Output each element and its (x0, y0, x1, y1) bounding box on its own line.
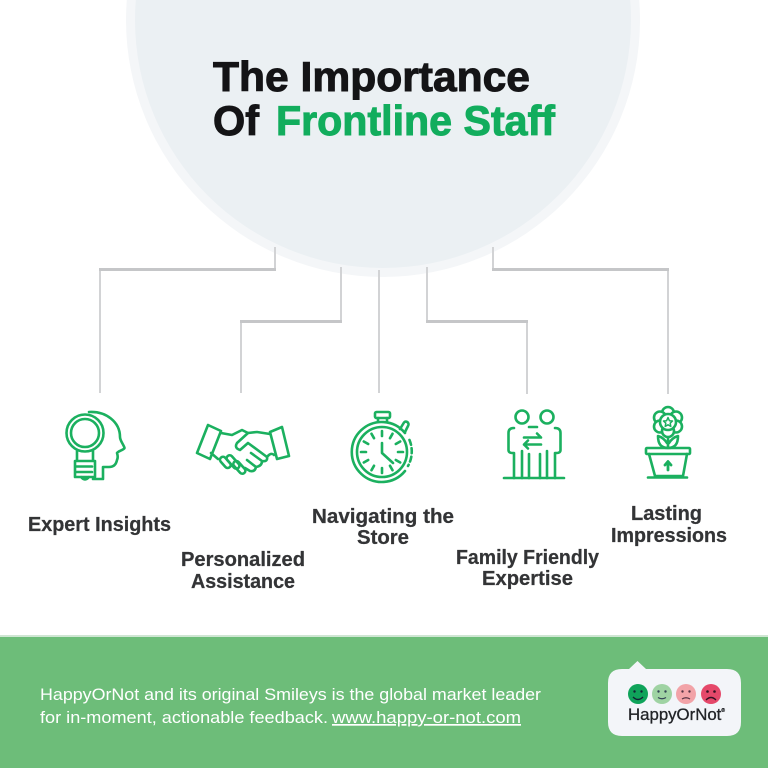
connector: expert insights (99, 247, 276, 393)
label: lasting impressions: Impressions (611, 525, 727, 547)
title (213, 53, 556, 144)
title: Frontline Staff (276, 97, 556, 144)
label: family friendly expertise (456, 547, 600, 590)
label: lasting impressions: Lasting (631, 503, 702, 525)
logo wordmark: ® (721, 707, 725, 714)
header circle (126, 0, 640, 277)
label: family friendly expertise: Family Friendly (456, 547, 600, 569)
logo wordmark: HappyOrNot (628, 705, 722, 724)
label: navigating the store: Store (357, 527, 409, 549)
connector: navigating the store (378, 270, 380, 393)
footer band (0, 635, 768, 768)
label: family friendly expertise: Expertise (482, 568, 573, 590)
logo: HappyOrNot speech bubble (608, 661, 741, 736)
footer text: for in-moment, actionable feedback. (40, 708, 328, 727)
icon: two people exchanging (504, 410, 564, 478)
footer text (40, 685, 541, 727)
connector: family friendly expertise (426, 267, 528, 394)
icon: lightbulb head (66, 412, 124, 480)
connector: lasting impressions (492, 247, 669, 394)
connector: personalized assistance (240, 267, 342, 393)
label: personalized assistance (181, 549, 305, 593)
label: navigating the store: Navigating the (312, 506, 454, 528)
smiley: very unhappy (701, 684, 721, 704)
label: navigating the store (312, 506, 454, 549)
label: personalized assistance: Personalized (181, 549, 305, 571)
label: expert insights: Expert Insights (28, 514, 171, 536)
smiley: unhappy (676, 684, 696, 704)
footer text: HappyOrNot and its original Smileys is the global market leader (40, 685, 541, 704)
smiley: happy (652, 684, 672, 704)
icon: potted flower (646, 407, 690, 478)
icon: stopwatch (352, 412, 412, 482)
icon: handshake (197, 425, 289, 475)
footer text: www.happy-or-not.com (331, 708, 521, 727)
label: lasting impressions (611, 503, 727, 547)
label: personalized assistance: Assistance (191, 571, 295, 593)
title: The Importance (213, 53, 530, 100)
smiley: very happy (628, 684, 648, 704)
title: Of (213, 97, 260, 144)
